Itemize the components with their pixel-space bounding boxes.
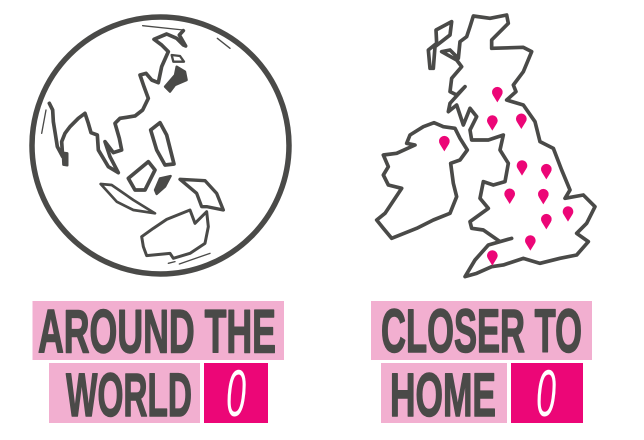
- counter: around the world: 0: [226, 356, 246, 430]
- panel: closer to home: [371, 15, 595, 430]
- sketch marks: [42, 26, 230, 264]
- panel: around the world: [32, 17, 289, 430]
- counter: closer to home: 0: [536, 356, 556, 430]
- map: uk and ireland: [377, 15, 595, 277]
- islands: [151, 123, 174, 165]
- map pins: [439, 87, 573, 266]
- heading: around the world: [32, 298, 284, 429]
- heading: closer to home: [371, 297, 592, 429]
- heading: around the world: WORLD: [66, 361, 192, 429]
- australia: [142, 210, 208, 258]
- heading: closer to home: HOME: [390, 361, 496, 429]
- asia mainland: [49, 31, 186, 173]
- heading: around the world: AROUND THE: [38, 298, 276, 366]
- icon: globe: [32, 17, 289, 274]
- counter: around the world: [204, 356, 268, 430]
- counter: closer to home: [511, 356, 583, 430]
